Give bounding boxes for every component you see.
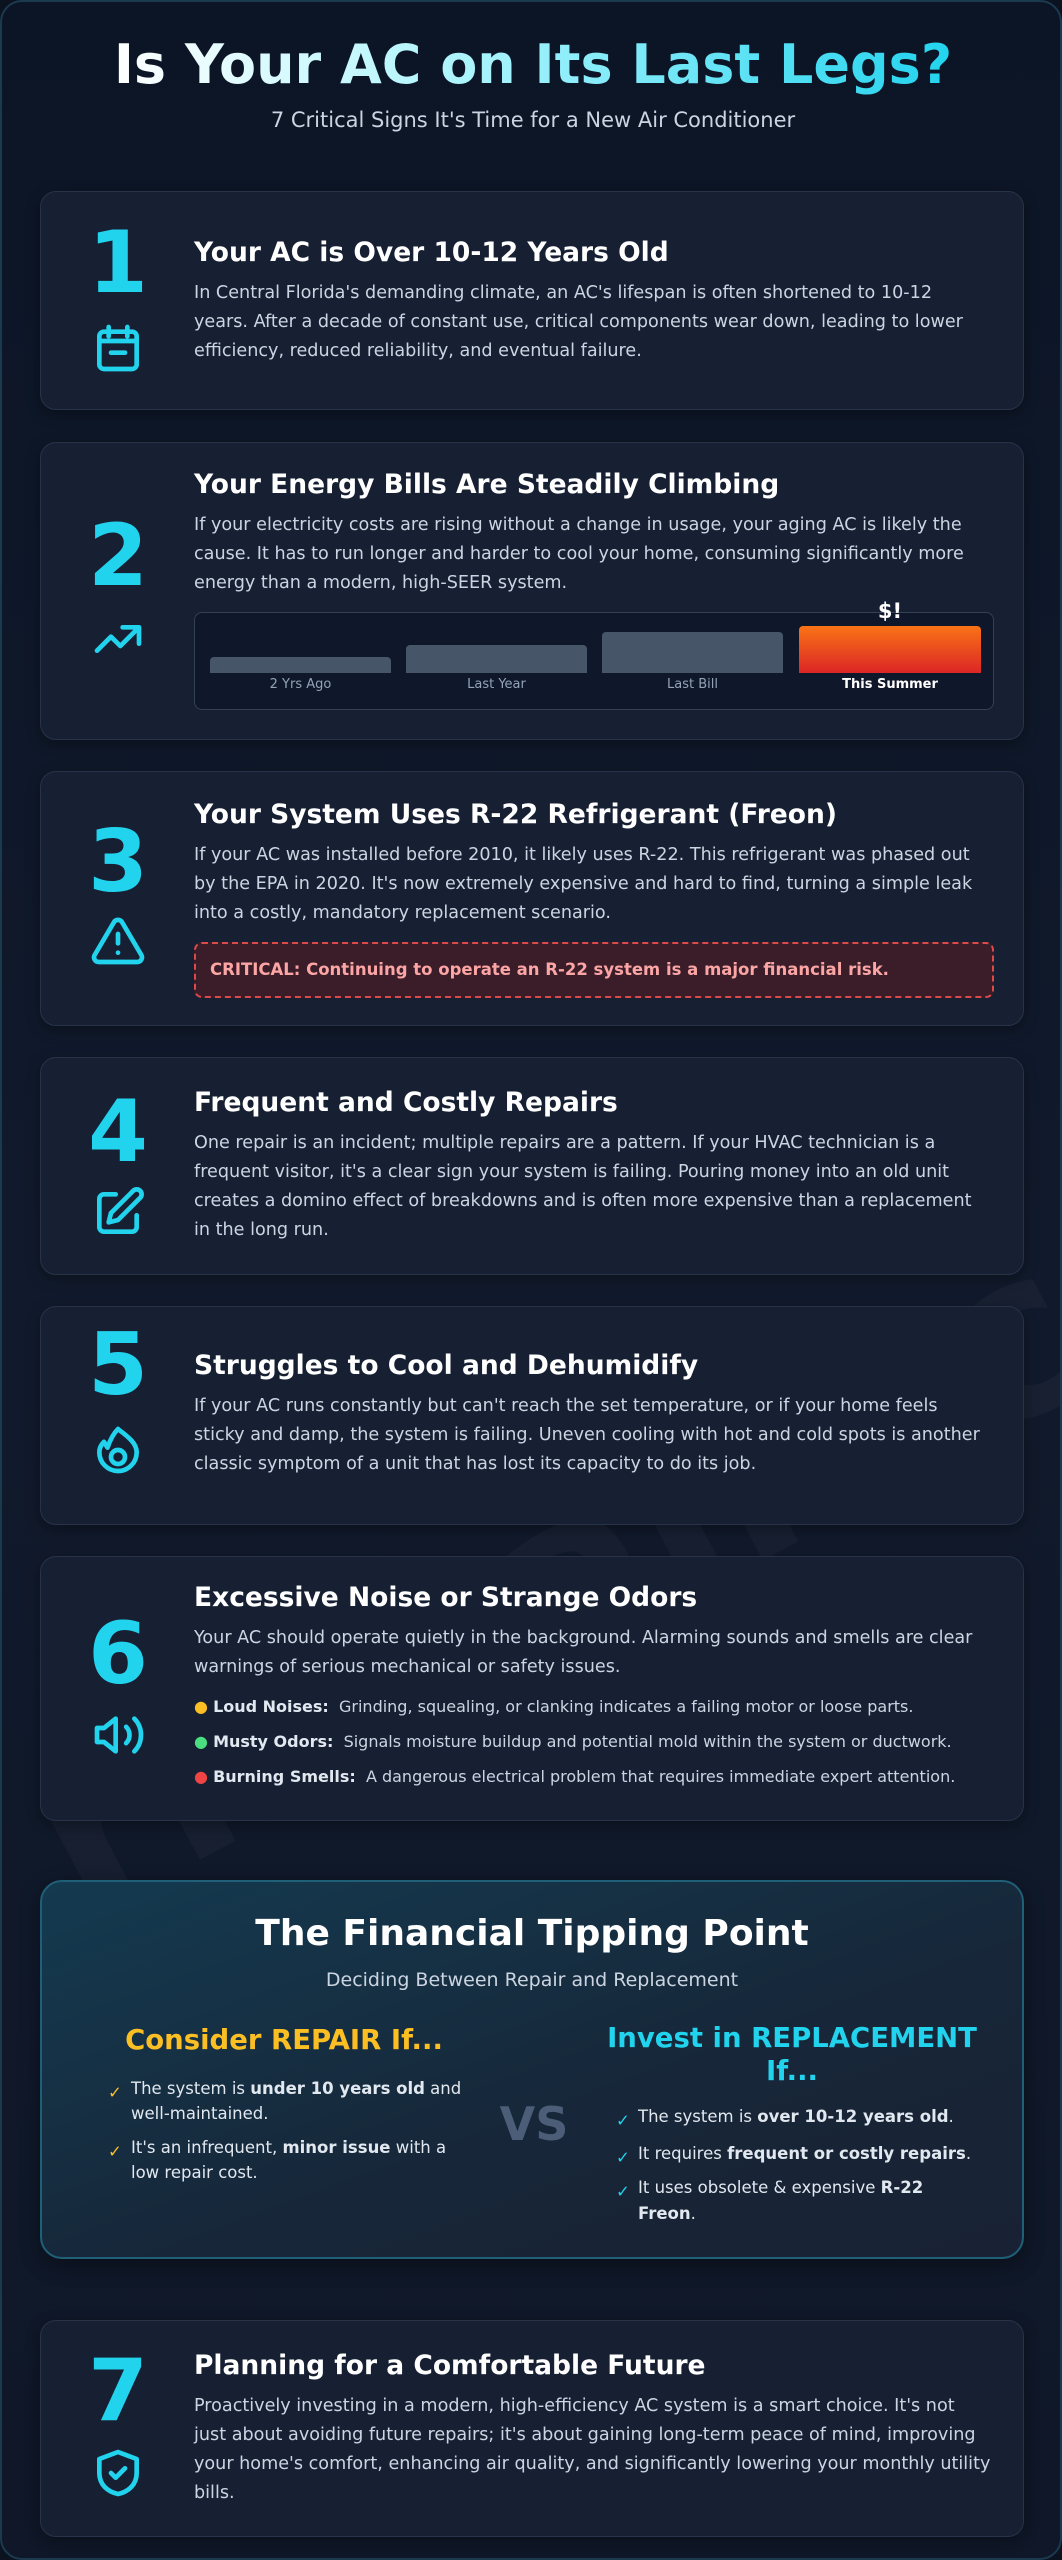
text: sign 6: warnings of serious mechanical or safety issues.: [194, 1657, 621, 1677]
text: sign 6: Your AC should operate quietly in the background. Alarming sounds and smells are clear: [194, 1628, 972, 1648]
text: sign 3: into a costly, mandatory replacement scenario.: [194, 903, 611, 923]
text: sign 4: One repair is an incident; multiple repairs are a pattern. If your HVAC technician is a: [194, 1133, 935, 1153]
text: sign 1: In Central Florida's demanding climate, an AC's lifespan is often shortened to 10-12: [194, 283, 932, 303]
bar chart: bills: Last Year: [467, 677, 526, 692]
icon: trending up: [94, 625, 142, 653]
text: sign 5: classic symptom of a unit that has lost its capacity to do its job.: [194, 1454, 756, 1474]
icon: speaker: [94, 1716, 144, 1754]
text: sign 4: [194, 1087, 972, 1240]
column: replacement: ✓: [616, 2182, 630, 2201]
text: sign 2: Your Energy Bills Are Steadily Climbing: [194, 469, 779, 500]
text: sign 3: [194, 799, 994, 998]
text: sign 1: [194, 237, 963, 361]
column: replacement: ✓: [616, 2148, 630, 2167]
icon: warning: [92, 918, 144, 964]
icon: edit: [97, 1187, 144, 1234]
column: replacement: The system is over 10-12 years old.: [638, 2107, 954, 2126]
number 2: 2: [88, 506, 148, 606]
column: repair: ✓: [108, 2083, 122, 2102]
number 7: 7: [88, 2341, 148, 2441]
text: sign 7: just about avoiding future repairs; it's about gaining long-term peace of mind, improving: [194, 2425, 976, 2445]
text: sign 1: years. After a decade of constant use, critical components wear down, leading to lower: [194, 312, 963, 332]
text: sign 7: [194, 2350, 990, 2503]
panel: sign 1: [40, 191, 1024, 410]
column: replacement: It uses obsolete & expensive R-22 Freon.: [638, 2178, 923, 2223]
panel: sign 3: [40, 771, 1024, 1026]
text: sign 2: cause. It has to run longer and harder to cool your home, consuming significantly more: [194, 544, 964, 564]
column: repair: Consider REPAIR If...: [125, 2024, 443, 2056]
text: sign 3: Your System Uses R-22 Refrigerant (Freon): [194, 799, 837, 830]
icon: shield check: [97, 2450, 139, 2496]
text: sign 4: frequent visitor, it's a clear sign your system is failing. Pouring money into an old unit: [194, 1162, 949, 1182]
number 3: 3: [88, 812, 148, 912]
text: sign 7: Planning for a Comfortable Future: [194, 2350, 706, 2381]
bullet list: symptoms: [194, 1697, 955, 1786]
callout: critical: [194, 942, 994, 998]
text: sign 5: [194, 1350, 980, 1474]
number 4: 4: [88, 1082, 148, 1182]
text: sign 1: efficiency, reduced reliability, and eventual failure.: [194, 341, 642, 361]
column: repair: well-maintained.: [131, 2104, 268, 2123]
column: repair: It's an infrequent, minor issue with a: [131, 2138, 446, 2157]
title: Is Your AC on Its Last Legs?: [114, 33, 952, 96]
text: sign 7: your home's comfort, enhancing air quality, and significantly lowering your monthly utility: [194, 2454, 990, 2474]
heading: financial: The Financial Tipping Point: [255, 1913, 809, 1954]
text: sign 4: Frequent and Costly Repairs: [194, 1087, 618, 1118]
text: sign 2: $!: [878, 599, 902, 623]
text: sign 4: creates a domino effect of breakdowns and is often more expensive than a replacement: [194, 1191, 972, 1211]
text: sign 5: Struggles to Cool and Dehumidify: [194, 1350, 698, 1381]
bar chart: bills: [194, 612, 994, 710]
panel: sign 5: [40, 1306, 1024, 1525]
text: sign 4: in the long run.: [194, 1220, 329, 1240]
text: sign 3: by the EPA in 2020. It's now extremely expensive and hard to find, turning a simple leak: [194, 874, 972, 894]
icon: calendar: [97, 324, 139, 372]
column: replacement: It requires frequent or costly repairs.: [638, 2144, 971, 2163]
column: replacement: ✓: [616, 2111, 630, 2130]
text: sign 5: If your AC runs constantly but can't reach the set temperature, or if your home feels: [194, 1396, 938, 1416]
column: repair: [108, 2024, 461, 2182]
subtitle: 7 Critical Signs It's Time for a New Air Conditioner: [271, 108, 795, 132]
column: repair: low repair cost.: [131, 2163, 258, 2182]
text: sign 2: energy than a modern, high-SEER system.: [194, 573, 567, 593]
text: sign 2: If your electricity costs are rising without a change in usage, your aging AC is likely the: [194, 515, 962, 535]
column: replacement: Invest in REPLACEMENT: [607, 2022, 977, 2054]
text: sign 1: Your AC is Over 10-12 Years Old: [194, 237, 669, 268]
text: sign 7: Proactively investing in a modern, high-efficiency AC system is a smart choice. It's not: [194, 2396, 955, 2416]
column: repair: The system is under 10 years old and: [131, 2079, 461, 2098]
bullet list: symptoms: ● Loud Noises: Grinding, squealing, or clanking indicates a failing motor or loose parts.: [194, 1697, 913, 1716]
bar chart: bills: Last Bill: [667, 677, 718, 692]
panel: sign 6: [40, 1556, 1024, 1821]
column: replacement: If...: [766, 2055, 818, 2087]
icon: flame: [97, 1426, 139, 1474]
bar chart: bills: 2 Yrs Ago: [270, 677, 331, 692]
column: replacement: [607, 2022, 977, 2223]
label: VS: VS: [500, 2097, 568, 2151]
panel: sign 2: [40, 442, 1024, 740]
panel: sign 4: [40, 1057, 1024, 1275]
text: sign 3: If your AC was installed before 2010, it likely uses R-22. This refrigerant was phased out: [194, 845, 970, 865]
text: sign 7: bills.: [194, 2483, 235, 2503]
panel: sign 7: [40, 2320, 1024, 2537]
text: sign 2: [194, 469, 994, 710]
text: sign 5: sticky and damp, the system is failing. Uneven cooling with hot and cold spots is another: [194, 1425, 980, 1445]
number 1: 1: [88, 213, 148, 313]
callout: critical: CRITICAL: Continuing to operate an R-22 system is a major financial risk.: [210, 960, 889, 979]
text: sign 6: Excessive Noise or Strange Odors: [194, 1582, 697, 1613]
bar chart: bills: This Summer: [842, 677, 938, 692]
column: repair: ✓: [108, 2142, 122, 2161]
subheading: Deciding Between Repair and Replacement: [326, 1969, 738, 1991]
text: sign 6: [194, 1582, 972, 1786]
number 5: 5: [88, 1315, 148, 1415]
number 6: 6: [88, 1604, 148, 1704]
panel: financial tipping point: [40, 1880, 1024, 2259]
bullet list: symptoms: ● Musty Odors: Signals moisture buildup and potential mold within the system or ductwork.: [194, 1732, 952, 1751]
bullet list: symptoms: ● Burning Smells: A dangerous electrical problem that requires immediate expert attention.: [194, 1767, 955, 1786]
